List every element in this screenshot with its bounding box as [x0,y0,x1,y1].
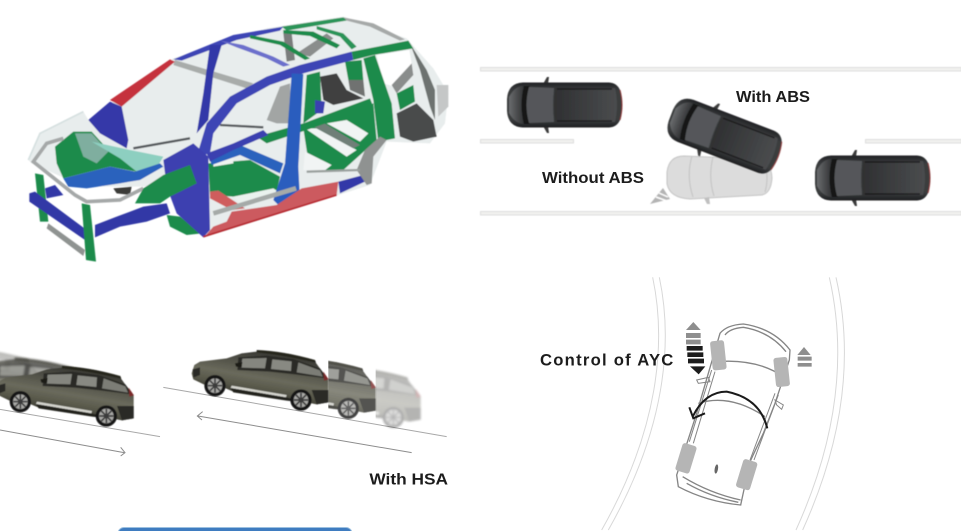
ghost car: far rolling back [376,369,422,430]
panel: AYC [540,277,844,530]
SUV: without HSA [0,366,134,427]
wheels [675,340,790,491]
ghost car: without ABS [667,156,772,204]
traffic cone [650,188,670,204]
curved road [602,277,844,530]
car outline [677,324,790,505]
slope lines and arrows [0,387,447,456]
right force arrow [797,347,812,367]
glass silhouette [28,17,448,237]
panel: HSA [0,349,448,488]
car: with ABS swerve [661,89,788,183]
roof structure [173,17,405,133]
label: Control of AYC: Control of AYC [540,350,673,369]
label: Without ABS: Without ABS [542,170,644,187]
cowl and red A-pillar [88,59,263,148]
label: With ABS: With ABS [736,89,810,106]
side frame [135,41,413,237]
left force arrows [686,322,705,374]
front bumper beam [28,112,202,262]
car: final position [815,150,930,206]
ghost cars: without HSA [0,351,74,382]
car: starting position [507,77,622,133]
ghost car: middle [328,360,376,420]
panel: ABS [480,68,961,215]
floor panels [207,98,377,210]
mirror mark [714,464,719,474]
rear structure [267,43,448,142]
road edges [480,68,961,215]
front inner structure [55,132,163,195]
label: With HSA: With HSA [369,471,448,488]
yaw arrow [689,392,767,428]
SUV: held with HSA [192,350,329,411]
button fragment [118,528,352,531]
panel: body structure [28,17,448,262]
rear side window [377,50,413,87]
